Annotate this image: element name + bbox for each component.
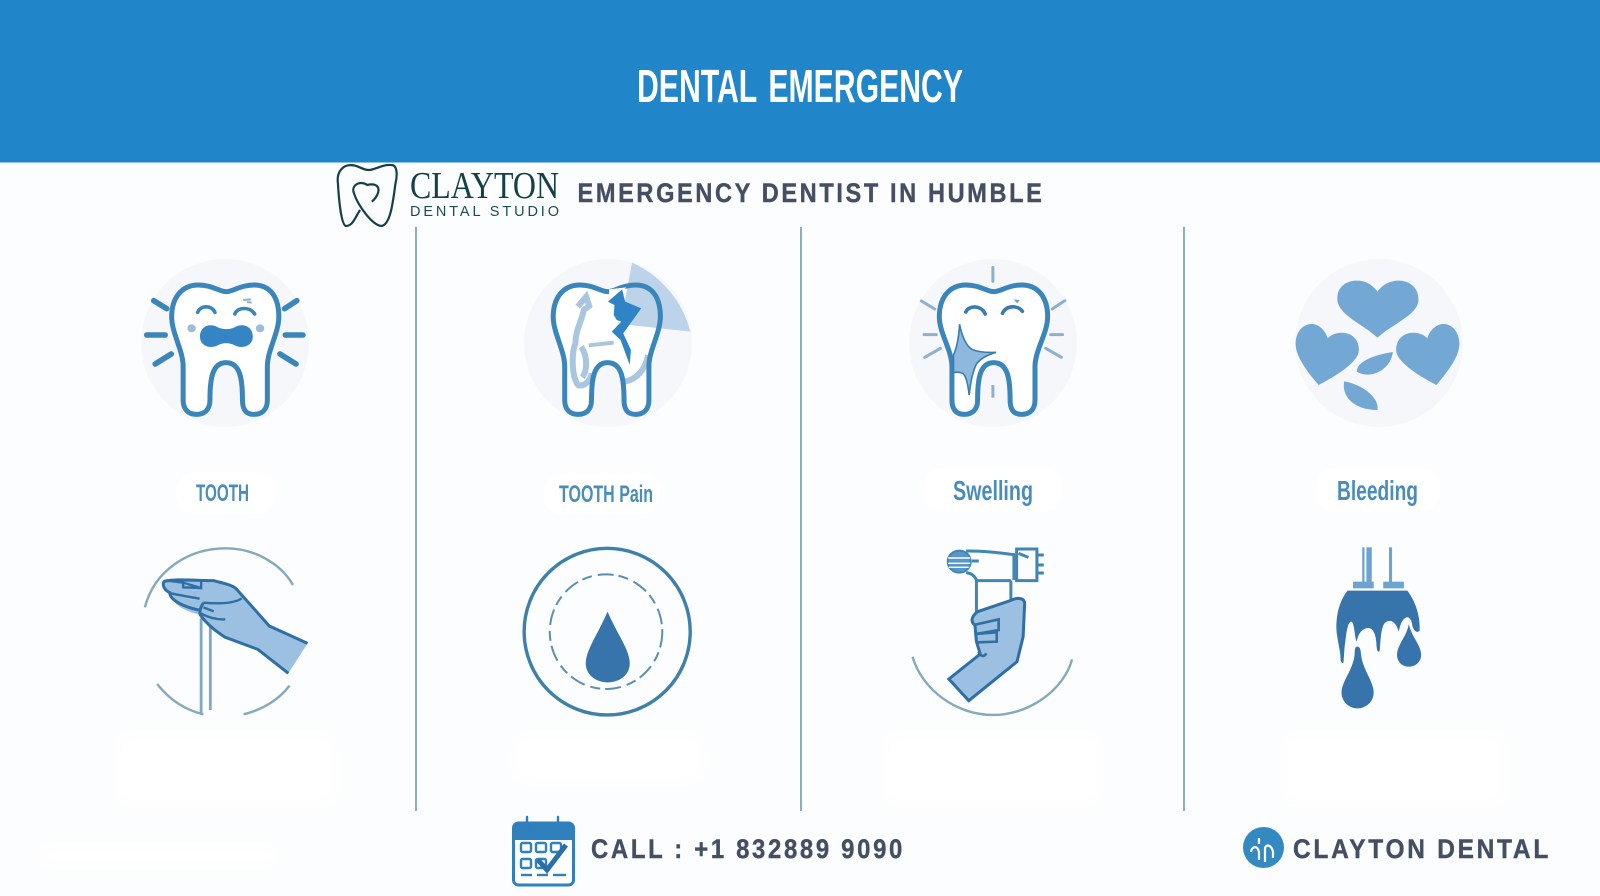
brand name: CLAYTON DENTAL xyxy=(1293,834,1551,864)
logo subline: DENTAL STUDIO xyxy=(410,204,559,220)
label: Bleeding xyxy=(1316,468,1440,512)
title: DENTAL EMERGENCY xyxy=(637,60,963,112)
icon: hearts and petals xyxy=(1295,259,1463,427)
header band xyxy=(0,0,1600,162)
label: TOOTH Pain: TOOTH Pain xyxy=(559,481,653,508)
blank white text plates xyxy=(40,734,1504,866)
panel: tooth xyxy=(141,259,309,714)
panel: swelling xyxy=(909,259,1077,715)
phone number: CALL : +1 832889 9090 xyxy=(591,834,905,864)
footer: Clayton Dental brand xyxy=(1243,827,1551,868)
clinic logo: Clayton Dental Studio xyxy=(338,165,559,226)
icon: crying tooth xyxy=(141,259,309,427)
panel: bleeding xyxy=(1295,259,1463,708)
icon: cracked tooth xyxy=(524,259,692,427)
column dividers xyxy=(416,227,1184,811)
label: Swelling: Swelling xyxy=(953,475,1033,506)
icon: hand under running water xyxy=(145,548,308,714)
panel: tooth pain xyxy=(524,259,692,715)
footer: call to action xyxy=(513,817,905,885)
icon: dripping blood drops xyxy=(1336,547,1421,708)
icon: sparkling swollen tooth xyxy=(909,259,1077,427)
logo wordmark: CLAYTON xyxy=(410,165,559,207)
label: TOOTH xyxy=(176,472,276,514)
subheading: EMERGENCY DENTIST IN HUMBLE xyxy=(578,178,1044,208)
icon: calendar with check xyxy=(513,817,574,885)
label: TOOTH Pain xyxy=(544,474,660,514)
icon: round brand mark xyxy=(1243,827,1284,868)
label: Swelling xyxy=(924,468,1062,512)
logo tooth mark xyxy=(338,165,397,226)
label: Bleeding: Bleeding xyxy=(1337,475,1418,506)
icon: hand holding dental tool xyxy=(913,549,1072,715)
icon: water drop in ring xyxy=(524,548,690,715)
label: TOOTH: TOOTH xyxy=(196,480,249,507)
